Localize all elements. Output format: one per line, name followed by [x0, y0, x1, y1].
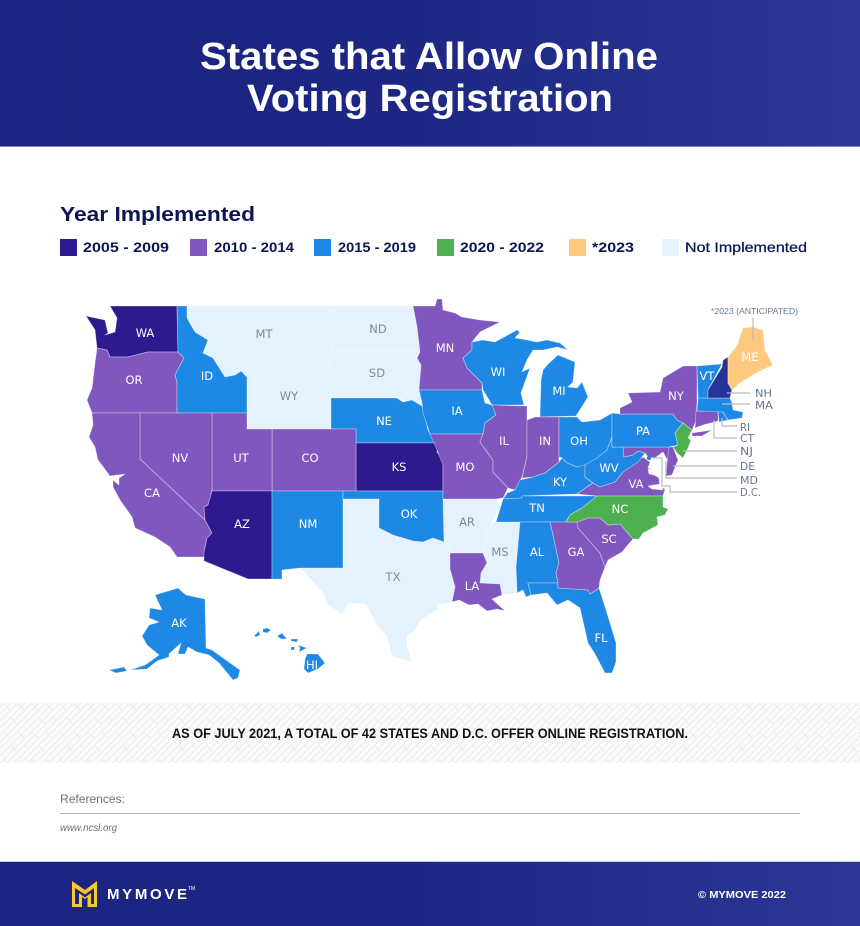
state: IN: IN	[539, 434, 551, 448]
references: www.ncsl.org	[60, 823, 117, 834]
state: HI	[254, 628, 325, 673]
state: KY: KY	[553, 475, 568, 489]
summary band	[0, 703, 860, 763]
state: PA: PA	[636, 424, 650, 438]
state: WY	[247, 366, 331, 429]
legend	[60, 239, 807, 256]
state: MS: MS	[491, 545, 509, 559]
state: MO: MO	[456, 460, 474, 474]
legend item: not implemented: Not Implemented	[685, 239, 807, 255]
state: IA	[419, 390, 496, 434]
callout: CT: CT	[740, 432, 754, 445]
state: MT: MT	[256, 327, 273, 341]
state: NC	[566, 496, 668, 539]
state: AZ	[204, 491, 272, 579]
callout: RI	[722, 418, 750, 434]
legend item: not implemented	[662, 239, 807, 256]
state: KS: KS	[392, 460, 406, 474]
logo wordmark: MYMOVE	[107, 886, 187, 903]
callout: MD: MD	[740, 474, 758, 487]
state: NH	[708, 357, 732, 398]
summary text: AS OF JULY 2021, A TOTAL OF 42 STATES AND D.C. OFFER ONLINE REGISTRATION.	[172, 726, 688, 741]
footer	[0, 861, 860, 926]
callout: NJ: NJ	[740, 445, 753, 458]
callout: D.C.: D.C.	[740, 486, 761, 499]
callout: MD	[666, 461, 758, 487]
legend item: 2020 - 2022	[437, 239, 544, 256]
title: States that Allow Online	[200, 36, 658, 78]
state: MD	[623, 447, 671, 467]
legend item: 2005 - 2009	[60, 239, 169, 256]
state: TN: TN	[528, 501, 545, 515]
callouts: small northeast states	[653, 307, 798, 499]
callout: RI: RI	[740, 421, 750, 434]
state: WY: WY	[280, 389, 299, 403]
state: VA: VA	[628, 477, 644, 491]
state: RI	[718, 411, 728, 422]
state: UT	[212, 413, 272, 491]
state: FL	[528, 583, 616, 673]
state: GA: GA	[568, 545, 585, 559]
US map	[86, 299, 773, 680]
state: IN	[522, 417, 559, 478]
state: IA: IA	[451, 404, 463, 418]
state: NV: NV	[172, 451, 188, 465]
state: WA: WA	[136, 326, 154, 340]
legend heading: Year Implemented	[60, 204, 255, 226]
state: AL: AL	[530, 545, 545, 559]
legend item: 2023: *2023	[592, 239, 634, 255]
state: NY	[620, 366, 712, 436]
state: MI: MI	[552, 384, 566, 398]
state: FL: FL	[594, 631, 608, 645]
state: PA	[612, 413, 683, 447]
copyright: © MYMOVE 2022	[698, 889, 786, 901]
state: NM: NM	[299, 517, 317, 531]
state: MN	[413, 299, 500, 390]
state: AR	[443, 499, 501, 553]
state: NE	[331, 398, 435, 443]
state: CA	[89, 413, 212, 557]
state: AZ: AZ	[234, 517, 250, 531]
state: TX	[300, 499, 455, 662]
state: AL	[516, 522, 559, 597]
marker: D.C.	[647, 456, 651, 460]
state: VA	[577, 457, 665, 496]
legend item: 2020 - 2022: 2020 - 2022	[460, 239, 544, 255]
legend item: 2015 - 2019	[314, 239, 416, 256]
callout: NH: NH	[755, 387, 772, 400]
header banner	[0, 0, 860, 147]
legend item: 2005 - 2009: 2005 - 2009	[83, 239, 169, 255]
state: TN	[496, 496, 597, 522]
state: WV: WV	[599, 461, 619, 475]
state: IL: IL	[499, 434, 509, 448]
state: MN: MN	[436, 341, 454, 355]
state: NC: NC	[612, 502, 628, 516]
title: Voting Registration	[247, 78, 613, 120]
state: ID: ID	[201, 369, 213, 383]
state: SD: SD	[369, 366, 385, 380]
legend item: 2010 - 2014: 2010 - 2014	[214, 239, 294, 255]
state: AK: AK	[171, 616, 187, 630]
state: ID	[175, 306, 247, 413]
callout: NJ	[683, 445, 753, 458]
state: MT	[187, 306, 331, 377]
state: OR	[87, 348, 184, 413]
state: ND: ND	[369, 322, 387, 336]
state: MS	[480, 522, 520, 595]
state: NM	[272, 491, 343, 579]
callout: 2023 anticipated: *2023 (ANTICIPATED)	[711, 307, 798, 316]
state: SC	[577, 518, 633, 567]
state: SD	[331, 351, 422, 405]
state: MO	[430, 434, 508, 499]
state: OK: OK	[401, 507, 418, 521]
state: VT	[697, 364, 722, 398]
state: HI: HI	[306, 658, 318, 672]
callout: 2023 anticipated	[711, 307, 798, 341]
callout: NH	[727, 387, 772, 400]
state: SC: SC	[601, 532, 617, 546]
state: ME	[728, 327, 773, 390]
state: TX: TX	[385, 570, 401, 584]
callout: DE	[673, 460, 755, 473]
state: AK	[109, 588, 240, 680]
callout: MA: MA	[755, 399, 774, 412]
state: WV	[585, 437, 645, 487]
state: MI	[540, 355, 588, 417]
state: OR: OR	[125, 373, 143, 387]
state: LA: LA	[465, 579, 479, 593]
state: WI and upper Michigan	[463, 330, 568, 405]
state: OH	[559, 413, 612, 467]
state: MA	[697, 398, 743, 420]
references	[60, 792, 800, 834]
state: NE: NE	[376, 414, 392, 428]
state: DE	[666, 447, 678, 476]
state: UT: UT	[233, 451, 250, 465]
callout: DE: DE	[740, 460, 755, 473]
references: References:	[60, 792, 125, 806]
state: NJ	[673, 423, 692, 458]
state: CO	[272, 429, 356, 491]
state: CO: CO	[301, 451, 319, 465]
state: LA	[450, 553, 505, 611]
callout: MA	[722, 399, 774, 412]
state: CT	[695, 411, 718, 428]
state: OH: OH	[570, 434, 588, 448]
state: WA	[86, 306, 178, 357]
state: GA	[550, 522, 605, 594]
state: ME: ME	[741, 350, 759, 364]
state: KY	[503, 458, 593, 499]
logo wordmark: TM	[188, 886, 195, 892]
state: OK	[343, 491, 444, 542]
title	[200, 36, 658, 120]
icon: MyMove logo	[72, 881, 97, 907]
callout: CT	[714, 420, 754, 445]
state: NY: NY	[668, 389, 685, 403]
state: IL	[480, 405, 527, 490]
state: NV	[140, 413, 212, 520]
legend item: 2023	[569, 239, 634, 256]
state: AR: AR	[459, 515, 475, 529]
state: WI and upper Michigan: WI	[491, 365, 505, 379]
state: ND	[331, 306, 420, 351]
legend item: 2010 - 2014	[190, 239, 294, 256]
state: CA: CA	[144, 486, 160, 500]
callout: D.C.	[653, 458, 761, 499]
state: VT: VT	[700, 369, 715, 383]
legend item: 2015 - 2019: 2015 - 2019	[338, 239, 416, 255]
state: KS	[356, 443, 443, 491]
